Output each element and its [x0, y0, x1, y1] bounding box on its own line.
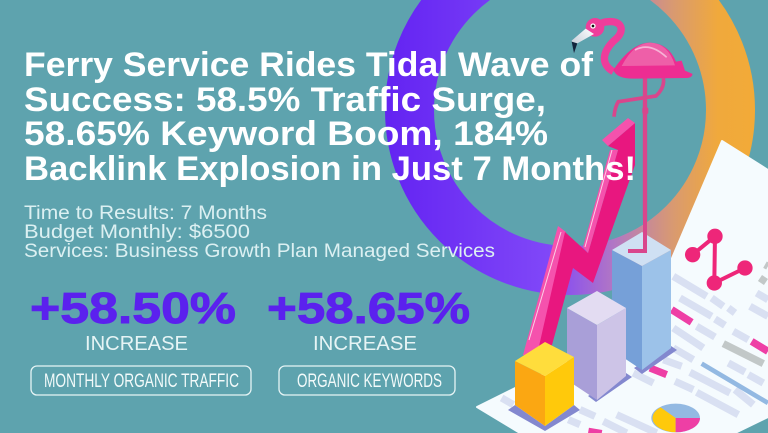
stat: monthly organic traffic — [30, 284, 251, 395]
stat: monthly organic traffic: INCREASE — [85, 333, 188, 355]
title — [24, 46, 636, 188]
icon: network graph — [685, 229, 753, 291]
project details: Services: Business Growth Plan Managed Services — [24, 241, 495, 262]
lavender bar — [567, 291, 632, 402]
title: Ferry Service Rides Tidal Wave of — [24, 46, 594, 84]
stat: monthly organic traffic: MONTHLY ORGANIC TRAFFIC — [44, 371, 239, 392]
project details — [24, 203, 495, 262]
blue bar — [612, 213, 677, 374]
report sheet illustration — [477, 141, 768, 433]
title: Backlink Explosion in Just 7 Months! — [24, 150, 636, 188]
stat: organic keywords: +58.65% — [267, 284, 470, 333]
stat: monthly organic traffic: +58.50% — [30, 284, 236, 333]
stat: organic keywords: INCREASE — [313, 333, 417, 355]
stat: organic keywords — [267, 284, 470, 395]
project details: Time to Results: 7 Months — [24, 203, 267, 224]
gradient ring — [410, 0, 730, 270]
stat: organic keywords: ORGANIC KEYWORDS — [297, 371, 442, 392]
yellow bar — [508, 342, 580, 431]
rising arrow — [523, 118, 635, 355]
project details: Budget Monthly: $6500 — [24, 222, 250, 243]
title: 58.65% Keyword Boom, 184% — [24, 115, 548, 153]
flamingo — [572, 18, 693, 220]
title: Success: 58.5% Traffic Surge, — [24, 81, 546, 119]
pie chart — [651, 404, 700, 432]
